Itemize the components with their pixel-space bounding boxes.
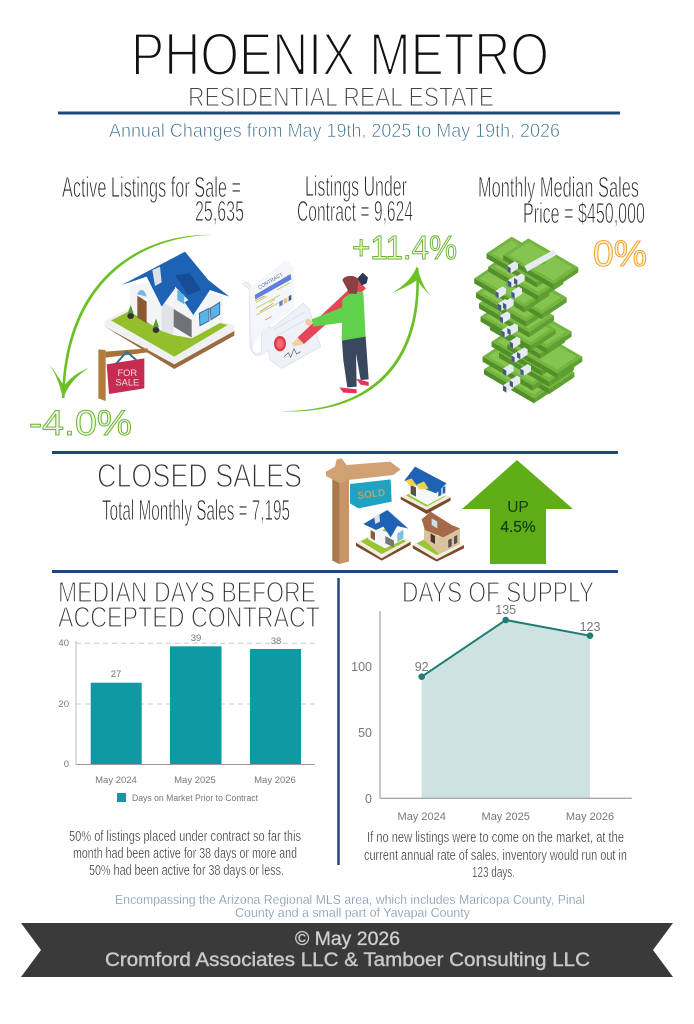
footnote: Encompassing the Arizona Regional MLS area, which includes Maricopa County, Pinal [115,892,585,907]
area line chart: 123 [580,620,600,634]
area line chart: May 2024 [398,811,446,823]
date range heading: Annual Changes from May 19th, 2025 to May 19th, 2026 [109,121,560,142]
total monthly sales: Total Monthly Sales = 7,195 [102,495,290,527]
icon: stacks of money [474,237,582,403]
under contract label: Listings Under [305,171,407,203]
active listings label: 25,635 [195,196,244,228]
bar chart [58,633,315,804]
median days heading: ACCEPTED CONTRACT [58,602,320,634]
arrow: up 4.5 percent [462,460,573,564]
arrow: listings down [49,235,212,399]
under contract label: Contract = 9,624 [297,196,413,228]
footnote: County and a small part of Yavapai County [235,905,470,920]
percent change: price: 0% [593,233,647,274]
bar chart: 40 [58,638,69,649]
median price label [478,172,645,230]
active listings label [62,172,244,228]
bar chart: 20 [58,699,69,710]
subtitle: RESIDENTIAL REAL ESTATE [188,82,494,112]
area line chart: 100 [351,660,372,674]
bar chart: 39 [191,633,201,644]
area line chart: May 2025 [482,811,530,823]
footer banner: © May 2026 [295,929,400,950]
median days description: 50% had been active for 38 days or less. [89,862,284,879]
footnote [115,892,585,920]
arrow: up 4.5 percent: UP [507,499,529,516]
footer banner [21,923,673,977]
area line chart: 0 [365,792,372,806]
panel: median days before accepted contract [58,577,320,879]
icon: house for sale: SALE [115,378,139,388]
days of supply description: 123 days. [472,864,515,881]
bottom left house [356,510,411,561]
bar chart: May 2026 [254,775,296,786]
top house [401,467,451,514]
panel: closed sales [97,457,573,564]
bar chart: May 2025 [174,775,216,786]
percent change: listings: -4.0% [29,404,132,443]
icon: sold sign and houses [326,458,464,564]
area line chart: 135 [495,603,516,617]
median days heading [58,577,320,634]
days of supply heading: DAYS OF SUPPLY [402,577,594,609]
percent change: contracts: +11.4% [352,229,457,266]
median days description: month had been active for 38 days or more and [73,845,297,862]
under contract label [297,171,413,228]
median days description: 50% of listings placed under contract so far this [69,828,301,845]
area line chart [351,603,632,823]
icon: person signing contract [243,260,369,393]
bar chart: 0 [64,759,69,770]
panel: median sales price [474,172,647,403]
panel: listings under contract [243,171,457,411]
icon: house for sale [98,252,234,401]
panel: days of supply [351,577,632,881]
title: PHOENIX METRO [131,21,549,88]
days of supply description [364,829,627,881]
active listings label: Active Listings for Sale = [62,172,241,204]
median days heading: MEDIAN DAYS BEFORE [58,577,316,609]
area line chart: 50 [358,726,372,740]
bar chart: May 2024 [95,775,137,786]
bottom right house [413,512,464,562]
bar chart: 38 [271,636,281,647]
bar chart: 27 [111,669,121,680]
chart legend: Days on Market Prior to Contract [132,793,258,804]
area line chart: 92 [415,660,429,674]
area line chart: May 2026 [566,811,614,823]
footer banner: Cromford Associates LLC & Tamboer Consulting LLC [105,950,590,971]
panel: active listings [29,172,244,443]
icon: house for sale: FOR [117,368,137,378]
closed sales heading: CLOSED SALES [97,457,302,494]
icon: person signing contract: CONTRACT [257,272,284,291]
icon: sold sign and houses: SOLD [357,488,386,502]
median days description [69,828,301,879]
arrow: contracts up [277,266,430,411]
arrow: up 4.5 percent: 4.5% [500,519,536,536]
